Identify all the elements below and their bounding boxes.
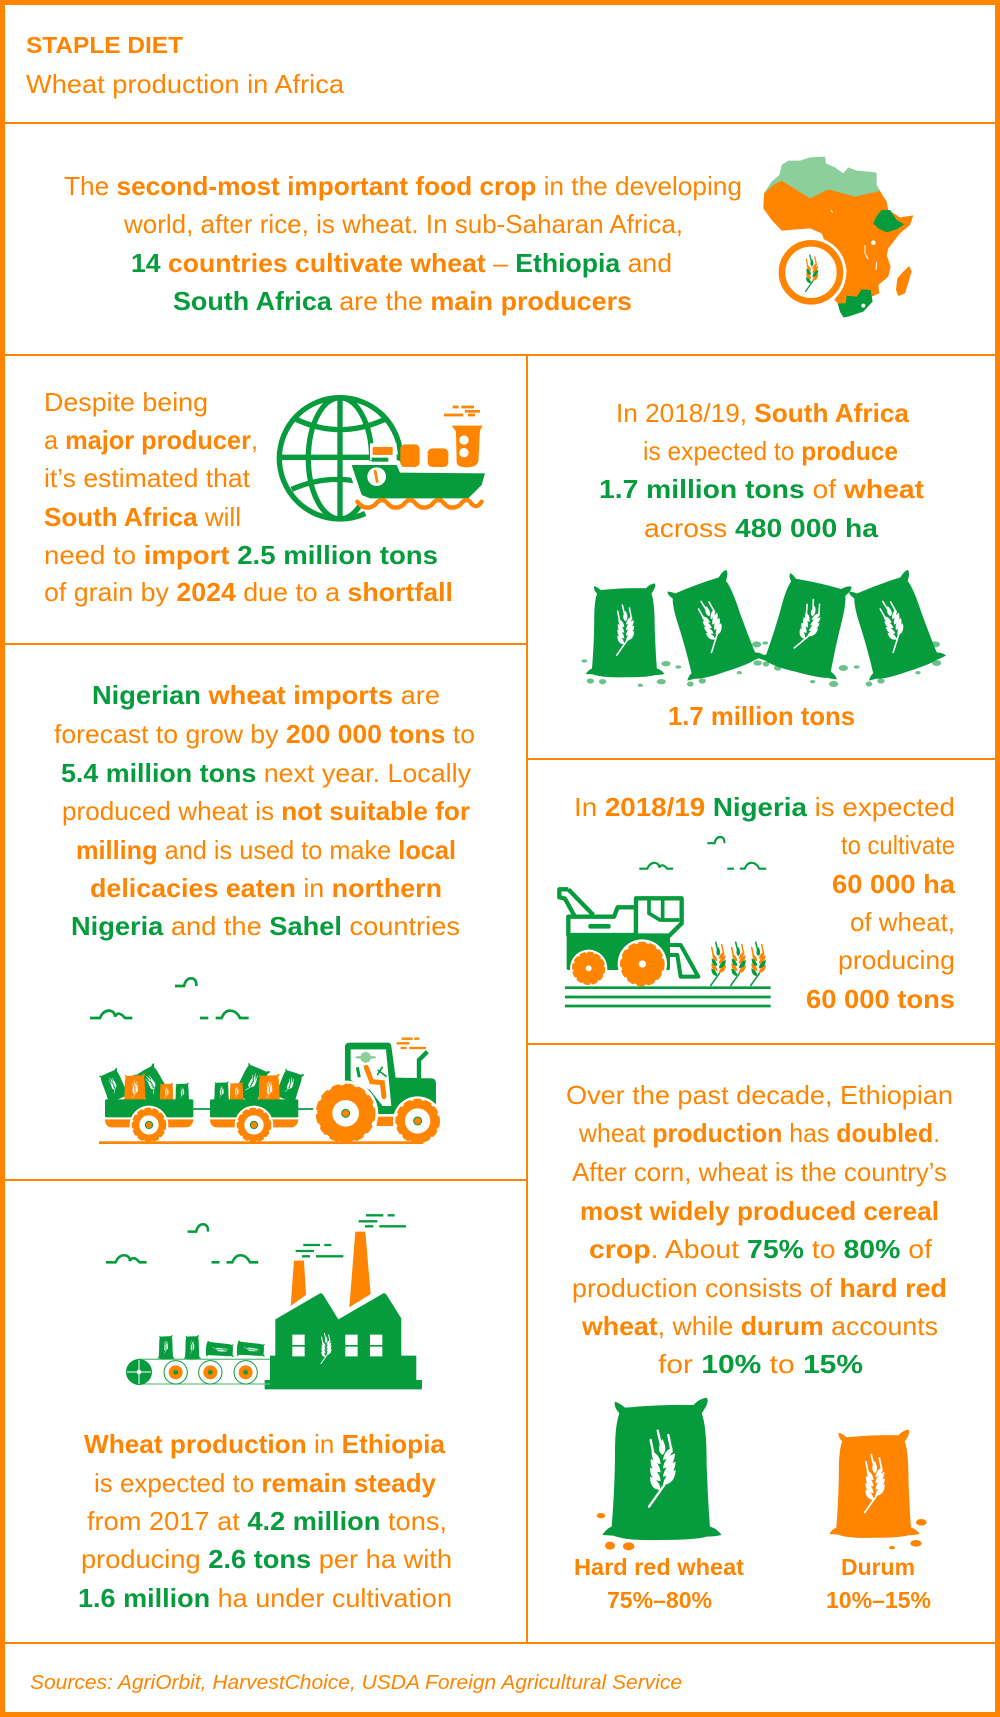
text: Nigeria cultivation: to cultivate bbox=[841, 830, 955, 860]
text: Nigerian imports: Nigerian wheat imports are bbox=[92, 680, 440, 710]
text: Nigerian imports: produced wheat is not suitable for bbox=[62, 796, 470, 826]
text: production: In 2018/19, South Africa bbox=[616, 398, 910, 428]
title: STAPLE DIET bbox=[26, 32, 183, 58]
intro text: The second-most important food crop in the developing bbox=[64, 171, 742, 201]
text: Ethiopia production: wheat, while durum accounts bbox=[581, 1311, 938, 1341]
label: durum: Durum bbox=[841, 1554, 915, 1580]
text: Nigeria cultivation: 60 000 tons bbox=[806, 984, 955, 1014]
text: Ethiopia outlook bbox=[78, 1429, 452, 1613]
intro text: world, after rice, is wheat. In sub-Saharan Africa, bbox=[123, 209, 683, 239]
text: imports: of grain by 2024 due to a shortfall bbox=[44, 577, 453, 607]
subtitle: Wheat production in Africa bbox=[26, 69, 345, 99]
text: Ethiopia production: Over the past decade, Ethiopian bbox=[566, 1080, 953, 1110]
icon: factory with conveyor bbox=[106, 1215, 422, 1389]
intro text bbox=[64, 171, 742, 316]
text: Ethiopia outlook: Wheat production in Ethiopia bbox=[84, 1429, 446, 1459]
icon: combine harvester bbox=[559, 837, 771, 1006]
text: Ethiopia outlook: is expected to remain steady bbox=[94, 1468, 437, 1498]
text: Ethiopia production: for 10% to 15% bbox=[658, 1349, 863, 1379]
text: production: is expected to produce bbox=[643, 436, 898, 466]
text: Ethiopia production bbox=[566, 1080, 953, 1379]
label: durum: 10%–15% bbox=[826, 1587, 931, 1613]
icon: tractor with trailers bbox=[90, 978, 442, 1146]
text: Ethiopia production: After corn, wheat is the country’s bbox=[572, 1157, 947, 1187]
intro text: 14 countries cultivate wheat – Ethiopia and bbox=[131, 248, 672, 278]
panel: header bbox=[5, 5, 995, 123]
label: hard red wheat: 75%–80% bbox=[607, 1587, 712, 1613]
text: Ethiopia production: crop. About 75% to 80% of bbox=[589, 1234, 933, 1264]
panel: intro with map bbox=[5, 124, 995, 355]
sacks label: 1.7 million tons bbox=[668, 701, 855, 731]
text: Ethiopia production: production consists of hard red bbox=[572, 1273, 947, 1303]
text: production: across 480 000 ha bbox=[644, 513, 879, 543]
label: hard red wheat: Hard red wheat bbox=[574, 1554, 744, 1580]
text: Nigerian imports: forecast to grow by 200 000 tons to bbox=[54, 719, 475, 749]
panel: sources bbox=[5, 1644, 995, 1712]
text: Ethiopia outlook: 1.6 million ha under cultivation bbox=[78, 1583, 452, 1613]
text: Nigerian imports: milling and is used to make local bbox=[76, 835, 456, 865]
icon: durum sack bbox=[829, 1430, 927, 1549]
label: durum bbox=[826, 1554, 931, 1613]
text: Nigeria cultivation: producing bbox=[838, 945, 955, 975]
text: Ethiopia outlook: from 2017 at 4.2 million tons, bbox=[87, 1506, 447, 1536]
panel: South Africa imports bbox=[5, 356, 527, 644]
icon: hard red wheat sack bbox=[597, 1398, 722, 1550]
text: imports: South Africa will bbox=[44, 502, 241, 532]
panel: Ethiopia production left bbox=[5, 1181, 527, 1643]
text: imports: a major producer, bbox=[44, 425, 258, 455]
text: production: 1.7 million tons of wheat bbox=[599, 474, 924, 504]
text: Ethiopia production: wheat production has doubled. bbox=[578, 1118, 940, 1148]
panel: Ethiopia wheat types bbox=[528, 1045, 995, 1643]
text: imports: it’s estimated that bbox=[44, 463, 251, 493]
text: imports bbox=[44, 387, 453, 607]
text: Nigerian imports: 5.4 million tons next year. Locally bbox=[61, 758, 471, 788]
text: Nigerian imports bbox=[54, 680, 475, 941]
text: Ethiopia outlook: producing 2.6 tons per ha with bbox=[81, 1544, 452, 1574]
text: production bbox=[599, 398, 924, 543]
text: Nigeria cultivation: In 2018/19 Nigeria is expected bbox=[574, 792, 955, 822]
sources text: Sources: AgriOrbit, HarvestChoice, USDA Foreign Agricultural Service bbox=[30, 1672, 682, 1694]
text: imports: Despite being bbox=[44, 387, 208, 417]
text: Nigeria cultivation bbox=[574, 792, 956, 1014]
text: Nigeria cultivation: 60 000 ha bbox=[832, 869, 956, 899]
text: Nigeria cultivation: of wheat, bbox=[850, 907, 955, 937]
text: imports: need to import 2.5 million tons bbox=[44, 540, 438, 570]
text: Ethiopia production: most widely produced cereal bbox=[580, 1196, 939, 1226]
map: Africa bbox=[763, 157, 913, 317]
panel: Nigerian imports bbox=[5, 645, 527, 1180]
icon: globe and ship bbox=[279, 398, 485, 519]
panel: Nigeria cultivation bbox=[528, 760, 995, 1044]
text: Nigerian imports: Nigeria and the Sahel countries bbox=[71, 911, 460, 941]
intro text: South Africa are the main producers bbox=[173, 286, 632, 316]
panel: South Africa production bbox=[528, 356, 995, 759]
label: hard red wheat bbox=[574, 1554, 744, 1613]
text: Nigerian imports: delicacies eaten in northern bbox=[90, 873, 442, 903]
icon: four sacks bbox=[581, 567, 947, 687]
